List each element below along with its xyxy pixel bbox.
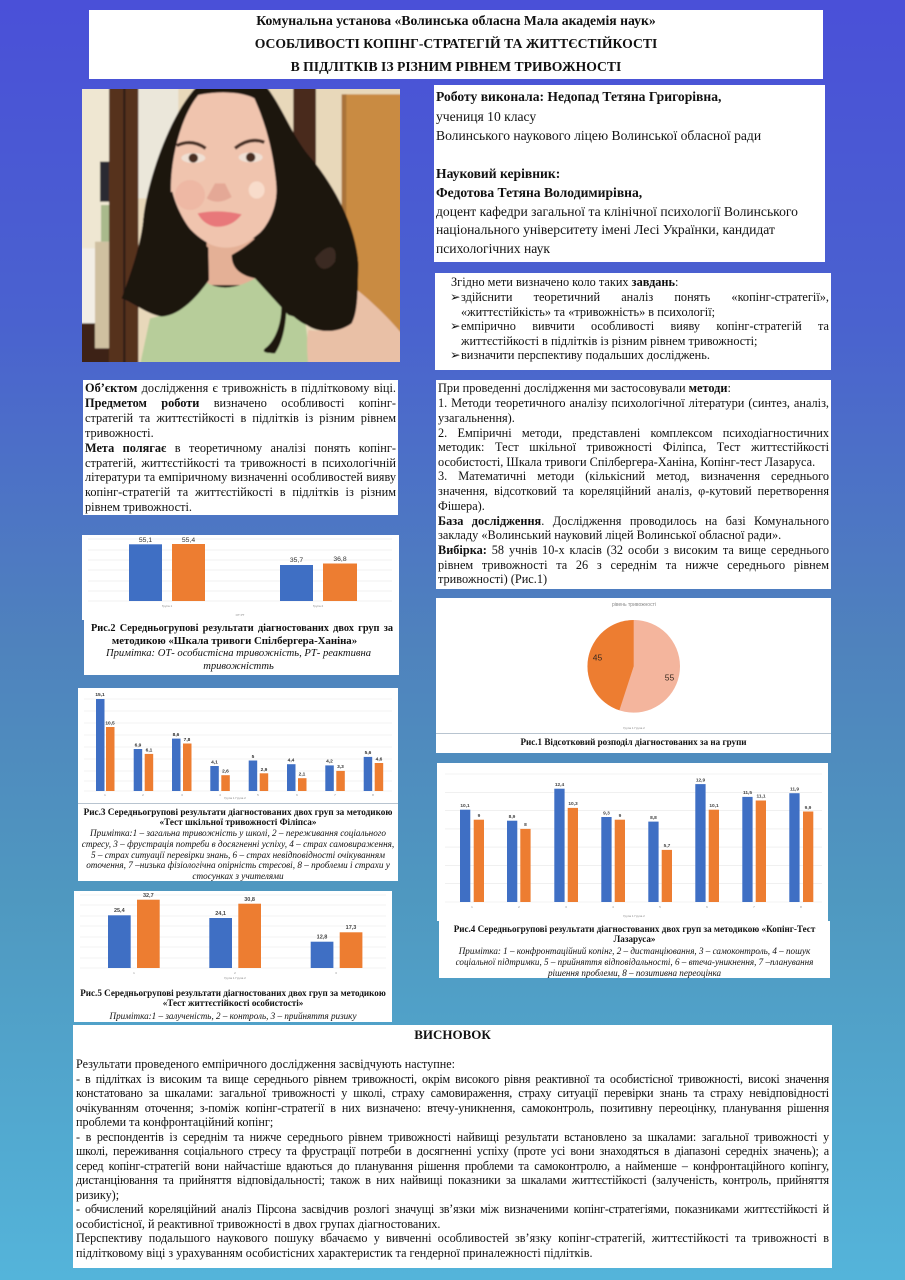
value labels: 5,6	[365, 750, 372, 756]
orange bars	[106, 727, 383, 791]
title panel: В ПІДЛІТКІВ ІЗ РІЗНИМ РІВНЕМ ТРИВОЖНОСТІ	[291, 59, 621, 74]
conclusion text: ризику);	[76, 1188, 119, 1202]
neck	[207, 238, 255, 285]
methods panel	[436, 380, 831, 589]
axis labels and legend: ОТ РТ	[236, 613, 245, 617]
methods panel: рівнем тривожності та 26 з середнім та нижче середнього рівнем	[438, 558, 829, 572]
tasks panel: визначити перспективу подальших досліджень.	[461, 348, 710, 362]
hair front lobes	[122, 192, 209, 317]
value labels: 8,6	[173, 732, 180, 738]
methods panel: закладу «Волинський науковий ліцей Волинської обласної ради».	[438, 528, 781, 542]
axis and legend: 8	[372, 793, 374, 797]
methods panel: методик: Тест шкільної тривожності Філіпса, Тест життєстійкості	[438, 440, 829, 454]
figure 3 caption: 5 – страх ситуації перевірки знань, 6 – страх невідповідності очікуванням	[91, 850, 385, 860]
orange bars	[474, 800, 813, 902]
blue bars	[108, 915, 333, 968]
conclusion text: очікуванням оточення; з-поміж копінг-стратегії в них визначено: втечу-уникнення, самоконтроль, позитивну переоцінку, планування рішення	[76, 1100, 829, 1114]
axis and legend: 7	[753, 905, 755, 909]
methods panel: узагальнення).	[438, 410, 515, 424]
title panel: ОСОБЛИВОСТІ КОПІНГ-СТРАТЕГІЙ ТА ЖИТТЄСТІЙКОСТІ	[255, 36, 657, 51]
conclusion text: проблеми та конфронтаційний копінг;	[76, 1115, 273, 1129]
methods panel: База дослідження. Дослідження проводилось на базі Комунального	[438, 514, 829, 528]
conclusion text: серед копінг-стратегій вони найчастіше вдаються до планування рішення проблеми та самоконтролю, а найменше – конфронтаційного копінгу,	[76, 1158, 829, 1172]
value labels: 3,3	[337, 764, 344, 770]
value labels: 4,1	[211, 760, 218, 766]
figure 1 caption	[436, 733, 831, 753]
conclusion text: - обчислений кореляційний аналіз Пірсона засвідчив розлогі значущі зв’язки між визначеними копінг-стратегіями, показниками життєстійкості й	[76, 1202, 829, 1216]
figure 3 bar chart	[78, 688, 398, 803]
value labels: 2,6	[222, 768, 229, 774]
conclusion text: школі, переживання соціального стресу та фрустрації потреби в досягненні успіху (проте усі вони знаходяться в діапазоні середніх значень); а	[76, 1144, 829, 1158]
conclusion text	[76, 1057, 830, 1260]
figure 2 caption: методикою «Шкала тривоги Спілбергера-Ханіна»	[112, 634, 357, 646]
axis and legend: 8	[800, 905, 802, 909]
value labels: 11,1	[756, 794, 766, 800]
author panel: Волинського наукового ліцею Волинської обласної ради	[436, 128, 761, 142]
value labels	[95, 692, 383, 778]
axis and legend: Група 1 Група 2	[224, 976, 246, 980]
value labels: 36,8	[333, 556, 347, 563]
axis and legend: 3	[565, 905, 567, 909]
figure 3 caption: стресу, 3 – фрустрація потреби в досягненні успіху, 4 – страх самовираження,	[82, 839, 394, 849]
value labels: 30,8	[244, 897, 255, 903]
axis and legend: 4	[219, 793, 221, 797]
axis and legend: Група 1 Група 2	[224, 796, 246, 800]
value labels	[460, 778, 812, 849]
value labels: 15,1	[95, 692, 105, 698]
figure 4 caption: рішення проблеми, 8 – позитивна переоцінка	[548, 968, 721, 978]
object and aim text panel: стратегій та життєстійкості в підлітків із різним рівнем	[85, 411, 396, 425]
value labels: 10,3	[568, 801, 578, 807]
pie labels	[593, 652, 674, 682]
tasks panel: ➢	[450, 319, 460, 333]
author panel: Науковий керівник:	[436, 166, 560, 180]
conclusion text: констатовано за шкалами: загальної тривожності у школі, страху самовираження, страху ситуації перевірки знань та страху невідповідності	[76, 1086, 829, 1100]
methods panel: 1. Методи теоретичного аналізу психологічної літератури (синтез, аналіз,	[438, 396, 829, 410]
object and aim text panel: літератури та емпіричному визначенні особливостей вияву	[85, 470, 396, 484]
value labels: 17,3	[346, 925, 356, 931]
axis and legend	[104, 793, 374, 800]
object and aim text panel	[83, 380, 398, 515]
figure 3 caption: Примітка:1 – загальна тривожність у школі, 2 – переживання соціального	[90, 828, 386, 838]
orange bars	[137, 900, 362, 968]
methods panel: 3. Математичні методи (кількісний метод, визначення середнього	[438, 469, 829, 483]
object and aim text panel: копінг-стратегій та життєстійкості в підлітків із різним	[85, 485, 396, 499]
bars group 1	[129, 544, 205, 601]
figure 3 caption	[78, 803, 398, 881]
value labels: 32,7	[143, 893, 154, 899]
methods panel: значення, відсотковий та кореляційний аналіз, φ-кутовий перетворення	[438, 484, 829, 498]
value labels	[114, 893, 356, 940]
methods panel: Фішера).	[438, 498, 485, 512]
portrait photo	[82, 89, 400, 362]
axis and legend: 5	[257, 793, 259, 797]
tasks panel: «життєстійкість» та «тривожність» в психології;	[461, 304, 715, 318]
value labels: 10,5	[105, 720, 115, 726]
figure 5 caption: Рис.5 Середньогрупові результати діагностованих двох груп за методикою	[80, 988, 386, 998]
methods panel: особистості, Шкала тривоги Спілбергера-Ханіна, Копінг-тест Лазаруса.	[438, 454, 815, 468]
figure 4 caption: Примітка: 1 – конфронтаційний копінг, 2 – дистанціювання, 3 – самоконтроль, 4 – пошук	[459, 946, 810, 956]
figure 3 caption: Рис.3 Середньогрупові результати діагностованих двох груп за методикою	[84, 806, 392, 816]
bars group 2	[280, 564, 357, 601]
value labels: 35,7	[290, 557, 303, 564]
value labels	[139, 537, 347, 564]
axis and legend: 6	[296, 793, 298, 797]
axis and legend	[471, 905, 802, 918]
figure 2 caption: Примітка: ОТ- особистісна тривожність, РТ- реактивна	[106, 648, 371, 659]
value labels: 11,5	[743, 790, 752, 796]
conclusion text: підлітковому віці з урахуванням особистісних характеристик та гендерної приналежності підлітків.	[76, 1246, 593, 1260]
methods panel: Вибірка: 58 учнів 10-х класів (32 особи з високим та вище середнього	[438, 543, 829, 557]
tasks panel: ➢	[450, 348, 460, 362]
figure 3 caption: оточення, 7 –низька фізіологічна опірність стресові, 8 – проблеми і страхи у	[86, 860, 390, 870]
figure 1 pie chart	[436, 598, 831, 733]
figure 2 caption: тривожністть	[203, 661, 274, 672]
value labels: 8	[524, 822, 527, 828]
figure 3 caption: «Тест шкільної тривожності Філіпса»	[160, 817, 316, 827]
value labels: 7,8	[184, 737, 191, 743]
axis and legend: 7	[334, 793, 336, 797]
value labels: 2,1	[299, 772, 306, 778]
pie labels: 45	[593, 652, 602, 662]
value labels: 4,2	[326, 758, 333, 764]
axis and legend: 1	[133, 971, 135, 975]
tasks panel: здійснити теоретичний аналіз понять «копінг-стратегії»,	[461, 290, 829, 304]
axis and legend: 5	[659, 905, 661, 909]
value labels: 12,9	[696, 778, 705, 784]
axis and legend: Група 1 Група 2	[623, 914, 645, 918]
tasks panel: Згідно мети визначено коло таких завдань:	[451, 275, 678, 289]
figure 4 caption	[439, 921, 830, 978]
figure 2 caption: Рис.2 Середньогрупові результати діагностованих двох груп за	[91, 623, 393, 634]
value labels: 11,9	[790, 786, 799, 792]
blue bars	[460, 784, 800, 902]
conclusion text: Перспективу подальшого наукового пошуку вбачаємо у вивченні особливостей зв’язку копінг-стратегій, життєстійкості та тривожності в	[76, 1231, 829, 1245]
axis and legend: 3	[335, 971, 337, 975]
pie labels: 55	[665, 672, 674, 682]
chart title: рівень тривожності	[612, 602, 656, 608]
axis and legend: 3	[181, 793, 183, 797]
legend: Група 1 Група 2	[623, 726, 645, 730]
figure 4 caption: Лазаруса»	[614, 934, 655, 944]
value labels: 12,4	[555, 782, 564, 788]
figure 4 caption: соціальної підтримки, 5 – прийняття відповідальності, 6 – втеча-уникнення, 7 –планування	[456, 956, 813, 966]
axis and legend: 1	[471, 905, 473, 909]
object and aim text panel: Предметом роботи визначено особливості копінг-	[85, 396, 396, 410]
conclusion heading: ВИСНОВОК	[414, 1027, 491, 1042]
axis labels and legend: Група 1	[162, 604, 173, 608]
axis and legend: 1	[104, 793, 106, 797]
value labels: 55,1	[139, 537, 152, 544]
author panel: психологічних наук	[436, 241, 550, 256]
figure 5 bar chart	[74, 891, 392, 980]
tasks panel: емпірично вивчити особливості вияву копінг-стратегій та	[461, 319, 829, 333]
methods panel: тривожності) (Рис.1)	[438, 572, 547, 586]
value labels: 8,9	[509, 814, 516, 820]
figure 2 caption	[84, 620, 399, 675]
author panel: національного університету імені Лесі Українки, кандидат	[436, 222, 775, 237]
value labels: 9	[478, 813, 481, 819]
value labels: 6,9	[135, 742, 142, 748]
author panel: Федотова Тетяна Володимирівна,	[436, 184, 642, 200]
author panel: доцент кафедри загальної та клінічної психології Волинського	[436, 204, 798, 218]
value labels: 24,1	[215, 911, 226, 917]
axis and legend: 2	[234, 971, 236, 975]
conclusion text: - в підлітках із високим та вище середнього рівнем тривожності, окрім високого рівня реактивної та особистісної тривожності, високі значення	[76, 1072, 829, 1086]
methods panel: При проведенні дослідження ми застосовували методи:	[438, 381, 731, 395]
value labels: 10,1	[709, 803, 719, 809]
value labels: 4,4	[288, 758, 295, 764]
value labels: 12,8	[317, 934, 327, 940]
value labels: 6,1	[146, 748, 153, 754]
figure 2 bar chart	[82, 535, 399, 620]
face	[171, 93, 276, 248]
value labels: 4,6	[376, 756, 383, 762]
conclusion panel	[73, 1025, 832, 1268]
conclusion text: - в респондентів із середнім та нижче середнього рівнем тривожності найвищі результати встановлено за шкалами: загальної тривожності у	[76, 1130, 829, 1144]
axis and legend: 2	[142, 793, 144, 797]
value labels: 8,8	[650, 815, 657, 821]
object and aim text panel: Мета полягає в теоретичному аналізі понять копінг-	[85, 440, 396, 454]
tasks panel	[435, 273, 831, 370]
figure 4 bar chart	[437, 763, 828, 921]
tasks panel: життєстійкості в підлітків із різним рівнем тривожності;	[461, 334, 757, 348]
figure 5 caption	[74, 980, 392, 1022]
object and aim text panel: стратегій, життєстійкості та тривожності в психологічній	[85, 456, 396, 470]
figure 1 caption: Рис.1 Відсотковий розподіл діагностованих за на групи	[520, 737, 747, 747]
conclusion text: особистісної, й реактивної тривожності в двох групах діагностованих.	[76, 1216, 440, 1230]
axis and legend: 2	[518, 905, 520, 909]
figure 5 caption: «Тест життєстійкості особистості»	[163, 998, 303, 1008]
figure 5 caption: Примітка:1 – залученість, 2 – контроль, 3 – прийняття ризику	[110, 1011, 356, 1021]
tasks panel: ➢	[450, 290, 460, 304]
author panel: Роботу виконала: Недопад Тетяна Григорівна,	[436, 89, 721, 104]
axis and legend: 6	[706, 905, 708, 909]
pie slices	[587, 620, 680, 713]
author panel: учениця 10 класу	[436, 108, 536, 124]
value labels: 5,7	[664, 843, 671, 849]
value labels: 25,4	[114, 908, 126, 914]
title panel	[89, 10, 823, 79]
figure 4 caption: Рис.4 Середньогрупові результати діагностованих двох груп за методикою «Копінг-Тест	[454, 924, 815, 934]
conclusion text: Результати проведеного емпіричного дослідження засвідчують наступне:	[76, 1057, 455, 1071]
top and shoulder	[140, 278, 311, 365]
value labels: 9,3	[603, 810, 610, 816]
figure 3 caption: стосунках з учителями	[192, 871, 284, 881]
object and aim text panel: рівнем тривожності.	[85, 500, 192, 514]
value labels: 2,9	[261, 767, 268, 773]
value labels: 10,1	[460, 803, 470, 809]
conclusion text: дистанціювання та прийняття відповідальності; також в них найвищі показники за шкалами життєстійкості (залученість, контроль, прийняття	[76, 1173, 829, 1187]
author panel	[434, 85, 825, 262]
hair back	[122, 85, 358, 331]
blue bars	[96, 699, 372, 791]
axis labels and legend: Група 2	[313, 604, 324, 608]
object and aim text panel: тривожності.	[85, 426, 154, 440]
axis and legend	[133, 971, 337, 980]
value labels: 9,9	[805, 805, 812, 811]
axis and legend: 4	[612, 905, 614, 909]
value labels: 9	[619, 813, 622, 819]
title panel: Комунальна установа «Волинська обласна Мала академія наук»	[256, 13, 656, 28]
axis labels and legend	[162, 604, 324, 617]
value labels: 5	[252, 754, 255, 760]
methods panel: 2. Емпіричні методи, представлені комплексом психодіагностичних	[438, 426, 829, 440]
object and aim text panel: Об’єктом дослідження є тривожність в підлітковому віці.	[85, 381, 396, 395]
value labels: 55,4	[182, 537, 195, 544]
